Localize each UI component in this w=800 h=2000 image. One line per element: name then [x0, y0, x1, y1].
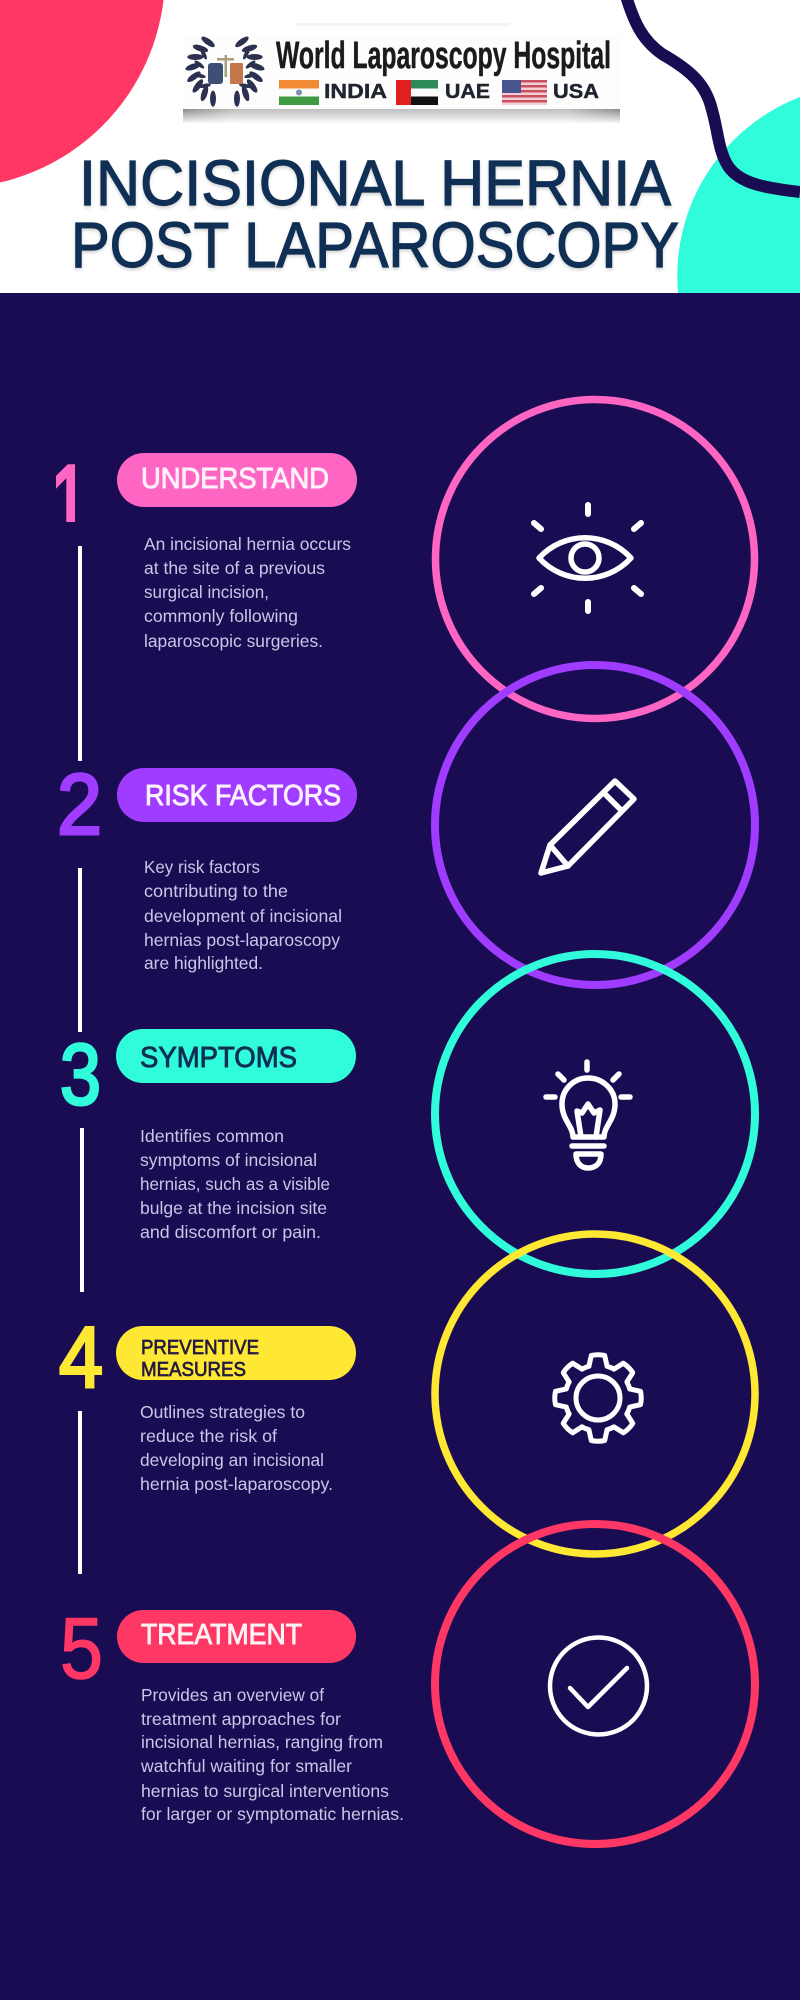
icon: gear — [555, 1355, 641, 1441]
title — [71, 147, 679, 281]
flag: India — [279, 80, 319, 105]
body text: understand: at the site of a previous — [144, 558, 325, 578]
label: UAE: UAE — [445, 81, 490, 103]
body text: symptoms: and discomfort or pain. — [140, 1222, 321, 1242]
logo wreath emblem — [185, 35, 265, 107]
ring: treatment — [435, 1524, 755, 1844]
step 3 — [60, 1027, 356, 1292]
connector line — [78, 1411, 82, 1574]
number 1: 1 — [51, 446, 88, 553]
body text: preventive measures: hernia post-laparoscopy. — [140, 1474, 333, 1494]
body text: symptoms: bulge at the incision site — [140, 1198, 327, 1218]
connector line — [78, 868, 82, 1032]
body text: understand: An incisional hernia occurs — [144, 534, 351, 554]
pill label: symptoms: SYMPTOMS — [140, 1042, 297, 1074]
decorative teal circle — [677, 97, 800, 293]
step 5 — [60, 1601, 404, 1824]
number 2: 2 — [57, 757, 102, 853]
title: INCISIONAL HERNIA — [79, 147, 671, 219]
body text: risk factors — [144, 857, 342, 973]
body text: risk factors: hernias post-laparoscopy — [144, 930, 340, 950]
body text: treatment: watchful waiting for smaller — [140, 1756, 352, 1776]
body text: treatment: Provides an overview of — [141, 1685, 324, 1705]
body text: symptoms: Identifies common — [140, 1126, 284, 1146]
pill: understand — [117, 453, 357, 507]
ring: symptoms — [435, 954, 755, 1274]
decorative navy wave — [626, 0, 800, 192]
body text: preventive measures — [140, 1402, 333, 1494]
flag: UAE — [396, 80, 438, 105]
body text: symptoms: symptoms of incisional — [140, 1150, 317, 1170]
body text: risk factors: contributing to the — [144, 881, 288, 901]
icon: pencil — [541, 781, 634, 873]
header background — [0, 0, 800, 293]
title: POST LAPAROSCOPY — [71, 209, 679, 281]
body text: treatment — [140, 1685, 404, 1824]
icon: check mark — [550, 1638, 647, 1734]
ring: preventive measures — [435, 1234, 755, 1554]
pill label: treatment: TREATMENT — [141, 1619, 302, 1651]
body text: risk factors: Key risk factors — [144, 857, 260, 877]
number 4: 4 — [59, 1310, 103, 1406]
body text: understand: commonly following — [144, 606, 298, 626]
connector line — [78, 546, 82, 761]
body text: understand — [144, 534, 351, 651]
pill: preventive measures — [116, 1326, 356, 1380]
body text: preventive measures: Outlines strategies to — [140, 1402, 305, 1422]
label: India: INDIA — [324, 81, 387, 103]
body text: treatment: treatment approaches for — [141, 1709, 341, 1729]
pill label: preventive measures: PREVENTIVE — [141, 1337, 259, 1359]
icon: eye — [534, 505, 641, 611]
pill label: preventive measures — [141, 1337, 259, 1381]
pill: treatment — [117, 1610, 356, 1663]
connector line — [80, 1128, 84, 1292]
decorative red circle — [0, 0, 165, 188]
step 1 — [51, 446, 357, 761]
ring: understand — [436, 400, 754, 718]
icon: light bulb — [546, 1062, 630, 1168]
body text: preventive measures: reduce the risk of — [140, 1426, 277, 1446]
pill label: preventive measures: MEASURES — [141, 1359, 246, 1381]
body text: treatment: incisional hernias, ranging from — [141, 1732, 383, 1752]
logo: World Laparoscopy Hospital — [183, 23, 620, 123]
ring: risk factors — [435, 665, 755, 985]
body text: symptoms — [140, 1126, 330, 1242]
body text: understand: laparoscopic surgeries. — [144, 631, 323, 651]
flag: USA — [502, 80, 547, 105]
logo name: World Laparoscopy Hospital — [276, 35, 611, 77]
body text: symptoms: hernias, such as a visible — [140, 1174, 330, 1194]
body text: risk factors: are highlighted. — [144, 953, 263, 973]
pill label: risk factors: RISK FACTORS — [145, 780, 341, 812]
pill: symptoms — [116, 1029, 356, 1083]
step 4 — [59, 1310, 356, 1574]
body text: treatment: for larger or symptomatic hernias. — [141, 1804, 404, 1824]
step 2 — [57, 757, 357, 1032]
pill label: understand: UNDERSTAND — [141, 463, 329, 495]
body text: understand: surgical incision, — [144, 582, 269, 602]
body text: treatment: hernias to surgical interventions — [141, 1781, 389, 1801]
body text: preventive measures: developing an incisional — [140, 1450, 324, 1470]
number 5: 5 — [60, 1601, 103, 1697]
label: USA: USA — [553, 81, 599, 103]
number 3: 3 — [60, 1027, 101, 1123]
pill: risk factors — [117, 768, 357, 822]
body text: risk factors: development of incisional — [144, 906, 342, 926]
